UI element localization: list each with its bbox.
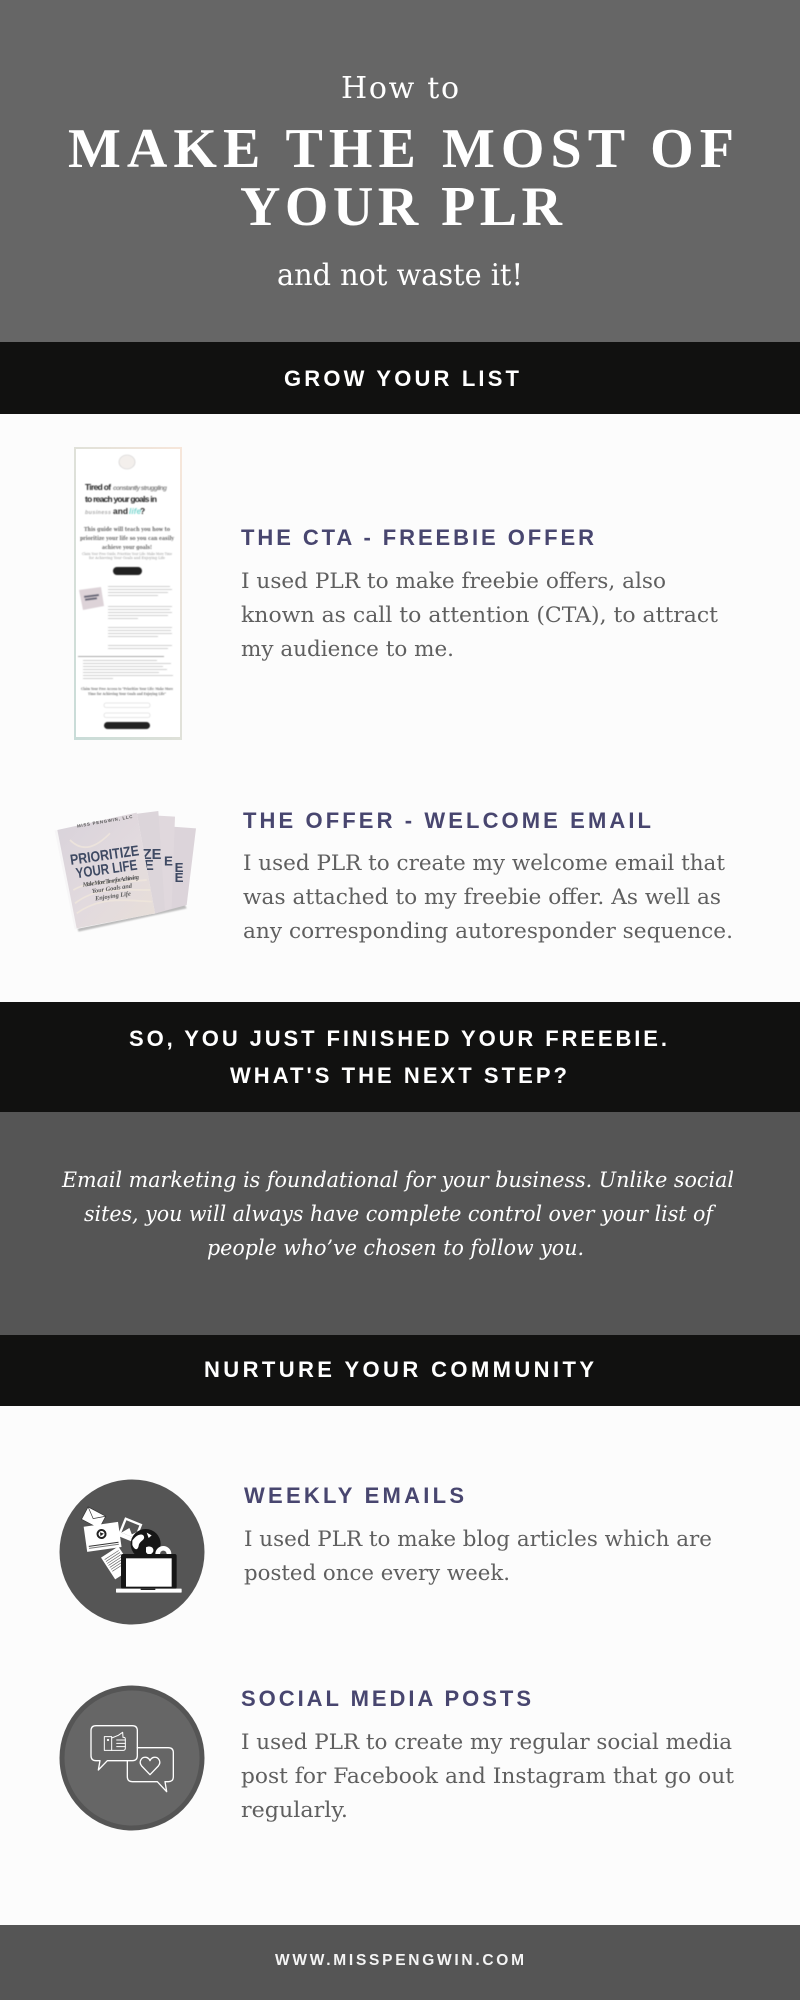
globe: [131, 1529, 161, 1559]
image: freebie landing page: life: [129, 506, 141, 516]
image: freebie landing page: prioritize your life so you can easily: [80, 536, 175, 542]
text: social media body: regularly.: [241, 1798, 348, 1823]
text: cta body: [241, 569, 718, 662]
image: stacked booklets: Your Goals and: [91, 882, 133, 895]
banner: nurture your community: [0, 1335, 800, 1406]
icon: weekly emails circle: [60, 1480, 204, 1624]
image: freebie landing page: achieve your goals!: [102, 545, 152, 551]
image: stacked booklets: Enjoying Life: [94, 890, 132, 903]
text: social media body: post for Facebook and Instagram that go out: [241, 1764, 734, 1789]
image: freebie landing page: Claim Your Free Access to "Prioritize Your Life: Make More: [81, 686, 173, 691]
banner: next step: WHAT'S THE NEXT STEP?: [230, 1063, 567, 1088]
text: weekly emails body: posted once every week.: [244, 1561, 510, 1586]
text: weekly emails body: I used PLR to make blog articles which are: [244, 1527, 712, 1552]
gear: [155, 1546, 171, 1562]
image: stacked booklets: ZE: [143, 847, 162, 863]
video: [84, 1522, 122, 1552]
image: stacked booklets: E: [164, 853, 173, 868]
image: freebie landing page: [74, 447, 182, 740]
heading: social media posts: SOCIAL MEDIA POSTS: [241, 1686, 531, 1711]
text: cta body: I used PLR to make freebie offers, also: [241, 569, 666, 594]
subtitle: and not waste it!: [277, 258, 523, 293]
image: freebie landing page: Claim Your Free Guide, Prioritize Your Life: Make More Time: [82, 552, 172, 556]
image: freebie landing page: for Achieving Your Goals and Enjoying Life: [89, 556, 165, 560]
text: weekly emails body: [244, 1527, 712, 1586]
panel: email marketing note: Email marketing is foundational for your business. Unlike social: [61, 1168, 734, 1193]
footer: WWW.MISSPENGWIN.COM: [275, 1952, 524, 1969]
heart bubble: [127, 1748, 173, 1792]
title: [68, 118, 734, 238]
text: offer body: any corresponding autoresponder sequence.: [243, 919, 733, 944]
panel: email marketing note: [0, 1112, 800, 1335]
heart: [140, 1757, 160, 1775]
envelope: [82, 1507, 106, 1529]
image: stacked booklets: PRIORITIZE: [69, 843, 140, 869]
text: offer body: [243, 851, 733, 944]
thumb: [104, 1732, 125, 1750]
banner: next step: SO, YOU JUST FINISHED YOUR FREEBIE.: [129, 1026, 667, 1051]
banner: nurture your community: NURTURE YOUR COMMUNITY: [204, 1357, 594, 1382]
heading: the offer: THE OFFER - WELCOME EMAIL: [243, 808, 651, 833]
image: freebie landing page: constantly struggling: [113, 485, 167, 492]
image: freebie landing page: ?: [140, 506, 145, 516]
image: stacked booklets: E: [144, 858, 154, 874]
heading: weekly emails: WEEKLY EMAILS: [244, 1483, 464, 1508]
text: offer body: was attached to my freebie offer. As well as: [243, 885, 721, 910]
banner: next step: [0, 1002, 800, 1112]
image: stacked booklets: MISS PENGWIN, LLC: [77, 814, 134, 829]
document: [101, 1546, 133, 1579]
footer: [0, 1925, 800, 2000]
heading: how to: How to: [341, 71, 459, 106]
image: freebie landing page: Time for Achieving Your Goals and Enjoying Life": [88, 691, 166, 696]
image: freebie landing page: and: [113, 506, 128, 516]
title: YOUR PLR: [240, 176, 563, 238]
icon: social media circle: [62, 1688, 202, 1828]
image: stacked booklets: E: [175, 860, 184, 875]
text: social media body: [241, 1730, 734, 1823]
photo: [118, 1517, 142, 1543]
image: stacked booklets: E: [175, 870, 184, 885]
title: MAKE THE MOST OF: [68, 118, 734, 180]
text: offer body: I used PLR to create my welcome email that: [243, 851, 725, 876]
like bubble: [91, 1726, 137, 1770]
image: stacked booklets: [55, 811, 196, 932]
image: freebie landing page: business: [85, 510, 111, 516]
image: stacked booklets: Make More Time for Achieving: [81, 874, 139, 889]
text: social media body: I used PLR to create my regular social media: [241, 1730, 732, 1755]
laptop: [121, 1554, 177, 1589]
panel: email marketing note: sites, you will always have complete control over your list of: [84, 1202, 717, 1227]
image: freebie landing page: Tired of: [85, 482, 111, 492]
banner: grow your list: GROW YOUR LIST: [284, 366, 520, 391]
text: cta body: my audience to me.: [241, 637, 454, 662]
panel: email marketing note: people who’ve chosen to follow you.: [207, 1236, 584, 1261]
image: freebie landing page: This guide will teach you how to: [84, 527, 170, 533]
banner: grow your list: [0, 342, 800, 414]
image: stacked booklets: YOUR LIFE: [75, 858, 139, 882]
panel: header: [0, 0, 800, 342]
text: cta body: known as call to attention (CTA), to attract: [241, 603, 718, 628]
heading: the cta: THE CTA - FREEBIE OFFER: [241, 525, 594, 550]
panel: nurture content: [60, 1480, 734, 1828]
image: freebie landing page: to reach your goals in: [85, 494, 157, 504]
panel: grow your list content: [55, 447, 733, 944]
